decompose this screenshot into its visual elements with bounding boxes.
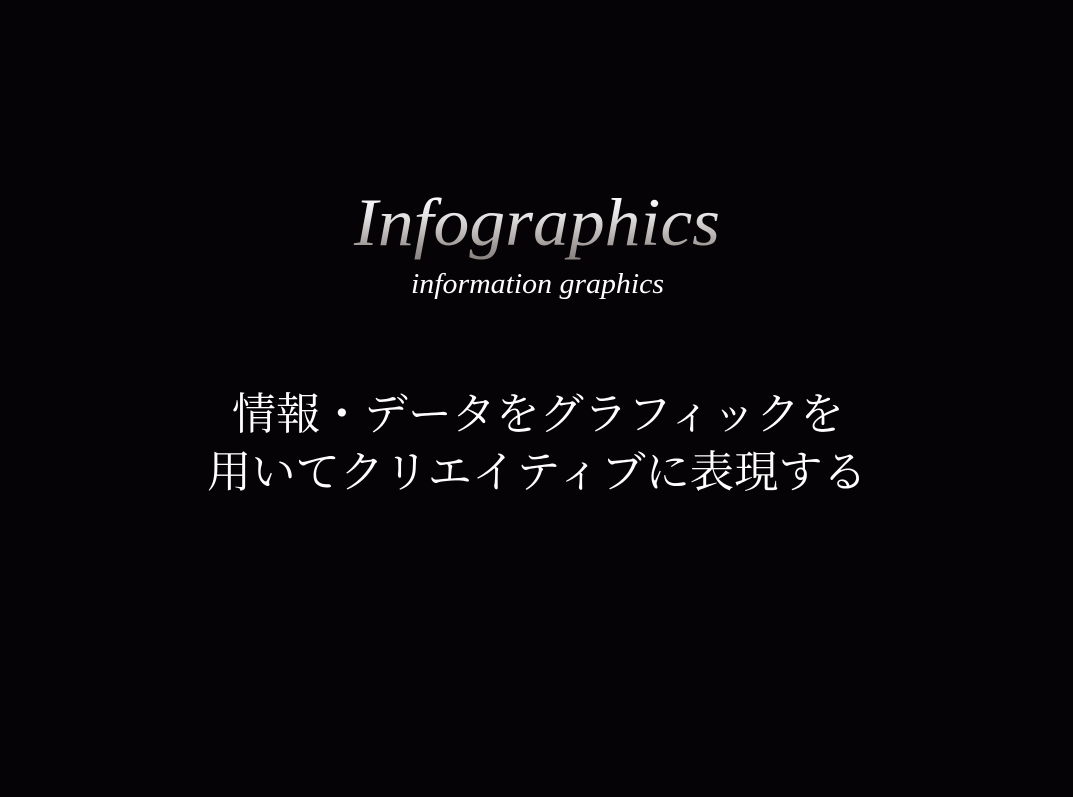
subtitle: information graphics: information graphics xyxy=(411,269,664,300)
text block: Japanese description xyxy=(207,390,867,497)
text block: Japanese description: 情報・データをグラフィックを xyxy=(232,390,844,439)
text block: Japanese description: 用いてクリエイティブに表現する xyxy=(207,448,867,497)
title: Infographics: Infographics xyxy=(353,184,720,260)
